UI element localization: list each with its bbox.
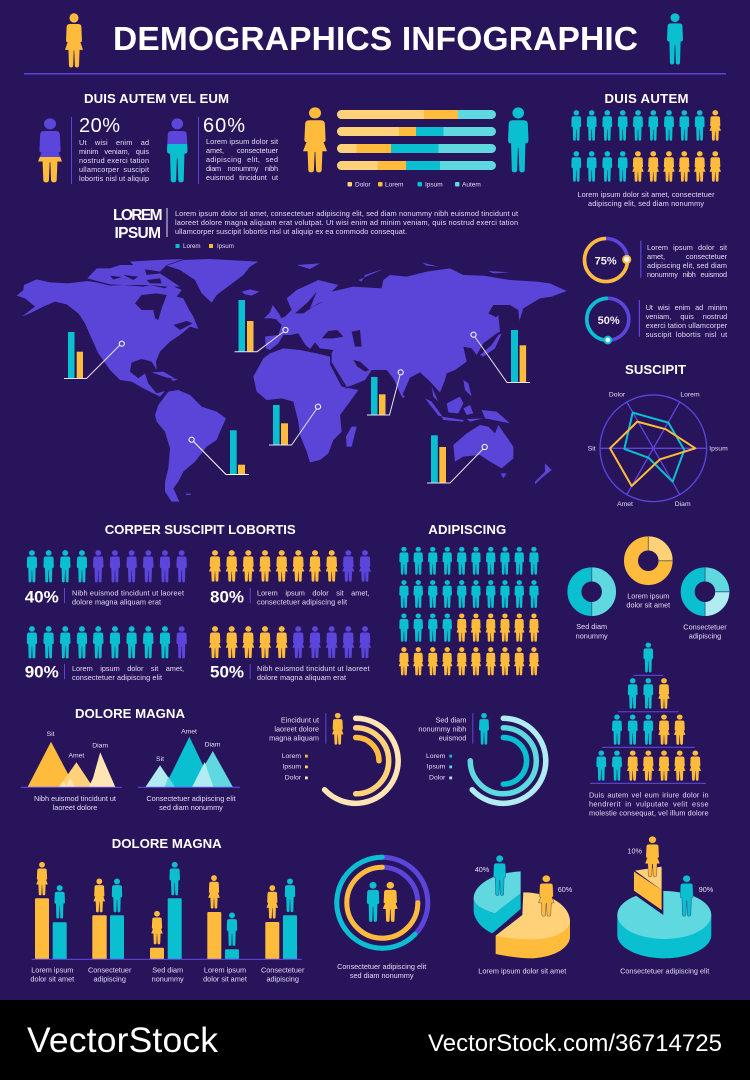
pie labels xyxy=(475,865,573,894)
panel: yellow radial bars xyxy=(269,713,398,803)
radar chart xyxy=(600,395,707,502)
people 80 percent xyxy=(209,550,371,582)
panel: adipiscing people grid xyxy=(399,522,539,675)
legend: Dolor xyxy=(429,775,446,782)
icon: man xyxy=(508,107,528,172)
bar row 1 xyxy=(337,110,496,119)
icon: woman xyxy=(303,107,327,172)
stat 20 percent: lobortis nisl ut aliquip xyxy=(79,174,149,183)
map bars: North America xyxy=(64,332,124,378)
donut left caption: nonummy xyxy=(576,632,608,640)
bars group 5 xyxy=(265,878,297,959)
caption: Consectetuer adipiscing elit xyxy=(337,962,426,971)
map bars: India xyxy=(367,370,403,415)
stat 60 percent: adipiscing elit, sed xyxy=(206,155,278,164)
bars group 1 xyxy=(35,862,67,959)
caption: adipiscing elit, sed diam nonummy xyxy=(588,199,704,208)
stat 60 percent: Lorem ipsum dolor sit xyxy=(206,137,278,146)
ring chart xyxy=(584,238,628,282)
grid row 2 xyxy=(399,580,539,608)
triangle chart right: Sit xyxy=(156,756,164,763)
bar captions: Consectetuer xyxy=(261,966,305,974)
panel: dolore magna triangles xyxy=(21,706,240,812)
text: suscipit lobortis nisl ut xyxy=(646,330,727,339)
stat 80 percent xyxy=(210,587,370,606)
triangle chart right: Amet xyxy=(181,729,197,736)
legend xyxy=(348,182,481,188)
bar captions: adipiscing xyxy=(266,974,299,984)
stat 50 percent xyxy=(210,663,370,682)
grid row 4 xyxy=(399,647,539,675)
pie labels: 90% xyxy=(699,885,714,894)
text: magna aliquam xyxy=(269,734,319,742)
text xyxy=(418,716,466,742)
caption: molestie consequat, vel illum dolore xyxy=(589,808,708,818)
map bars: South America xyxy=(189,430,249,474)
pyramid level 1 xyxy=(633,642,663,676)
bar captions: Lorem ipsum xyxy=(204,966,246,974)
people 40 percent xyxy=(27,550,187,582)
text: laoreet dolore xyxy=(274,724,319,734)
donut right caption: Consectetuer xyxy=(683,622,727,631)
stat 60 percent: diam nonummy nibh xyxy=(206,164,278,173)
heading: DUIS AUTEM xyxy=(604,91,688,106)
bar captions: Consectetuer xyxy=(88,966,132,974)
heading: DOLORE MAGNA xyxy=(75,706,185,721)
stat 20 percent: ullamcorper suscipit xyxy=(79,165,149,174)
triangle chart left: Diam xyxy=(92,743,108,750)
caption right: Consectetuer adipiscing elit xyxy=(146,794,236,803)
ring chart xyxy=(337,857,428,948)
icon: man xyxy=(367,882,379,922)
legend: Lorem xyxy=(183,243,201,250)
radar labels: Dolor xyxy=(609,392,626,398)
legend xyxy=(282,753,308,782)
stat 90 percent: Lorem ipsum dolor sit amet, xyxy=(72,664,184,673)
panel: lorem ipsum intro xyxy=(113,207,518,250)
heading: CORPER SUSCIPIT LOBORTIS xyxy=(105,522,296,537)
donut left xyxy=(574,567,609,616)
bar captions: dolor sit amet xyxy=(203,974,247,984)
panel: progress 50 percent xyxy=(587,298,728,344)
panel: stacked bars xyxy=(303,107,528,188)
legend xyxy=(176,243,234,250)
bar captions: adipiscing xyxy=(93,974,126,984)
map bars: Australia xyxy=(427,435,487,483)
bar captions xyxy=(30,966,305,984)
stat 80 percent: 80% xyxy=(210,587,244,606)
stat 90 percent xyxy=(25,663,184,682)
legend: Dolor xyxy=(285,775,302,782)
footer: watermark band xyxy=(0,1000,750,1080)
bar row 4 xyxy=(337,161,496,170)
panel: dolore magna bar chart xyxy=(30,836,305,984)
caption: Lorem ipsum dolor sit amet xyxy=(478,966,566,976)
pie labels: 60% xyxy=(558,885,573,894)
text: nonummy nibh xyxy=(418,724,466,734)
panel: suscipit radar xyxy=(588,362,728,508)
radar labels xyxy=(588,392,728,508)
paragraph: Lorem ipsum dolor sit amet, consectetuer adipiscing elit, sed diam nonummy nibh euismod tincidunt ut xyxy=(175,209,518,218)
text xyxy=(647,243,728,279)
stat 40 percent xyxy=(25,587,184,606)
caption xyxy=(589,790,708,818)
heading: LOREM xyxy=(113,207,162,224)
icon: woman xyxy=(383,882,398,922)
icon: woman xyxy=(332,713,344,745)
caption: sed diam nonummy xyxy=(350,971,414,980)
caption left: laoreet dolore xyxy=(53,803,97,812)
caption xyxy=(337,962,426,980)
legend: Ipsum xyxy=(217,243,234,250)
panel: corper suscipit lobortis xyxy=(25,522,371,682)
paragraph: ullamcorper suscipit lobortis nisl ut aliquip ex ea commodo consequat. xyxy=(175,227,407,236)
icon: man in header xyxy=(667,13,683,64)
triangle chart right: Diam xyxy=(205,741,221,748)
donut top xyxy=(631,536,673,578)
pie labels xyxy=(627,846,714,894)
text: euismod xyxy=(439,734,466,742)
legend: Lorem xyxy=(282,753,301,760)
bar row 3 xyxy=(337,144,496,153)
heading: SUSCIPIT xyxy=(625,362,686,377)
panel: progress 75 percent xyxy=(584,238,728,282)
text xyxy=(646,303,728,339)
people 90 percent xyxy=(27,626,187,658)
pie chart xyxy=(474,855,570,958)
icon: man xyxy=(479,713,489,745)
panel: people pyramid xyxy=(589,642,708,818)
text: exerci tation ullamcorper xyxy=(646,321,728,330)
stat 40 percent: Nibh euismod tincidunt ut laoreet xyxy=(72,588,184,598)
caption xyxy=(578,190,715,208)
stat 50 percent: Nibh euismod tincidunt ut laoreet xyxy=(257,664,370,673)
icon: man 60 percent xyxy=(167,118,188,182)
donut left caption: Sed diam xyxy=(576,622,607,631)
text: veniam, quis nostrud xyxy=(646,312,727,321)
text: adipiscing elit, sed diam xyxy=(647,261,727,270)
stat 60 percent xyxy=(203,115,279,182)
stat 20 percent: minim veniam, quis xyxy=(79,147,149,156)
map bars: East Asia xyxy=(471,330,530,382)
legend: Ipsum xyxy=(427,764,446,771)
grid row 3 xyxy=(399,613,539,642)
stat 20 percent: 20% xyxy=(79,115,120,137)
bars group 2 xyxy=(92,878,124,959)
donut top caption xyxy=(626,592,670,610)
text: Sed diam xyxy=(435,716,466,724)
radar labels: Amet xyxy=(617,501,633,508)
heading: DUIS AUTEM VEL EUM xyxy=(84,91,229,106)
panel: three donuts xyxy=(574,536,729,640)
bars group 4 xyxy=(207,875,239,959)
pie labels: 40% xyxy=(475,865,490,874)
title: DEMOGRAPHICS INFOGRAPHIC xyxy=(113,21,638,58)
legend: Lorem xyxy=(426,753,446,760)
pie labels: 10% xyxy=(627,846,643,856)
icon: woman in header xyxy=(65,13,83,67)
radial chart xyxy=(470,718,546,803)
panel: duis autem vel eum xyxy=(38,91,279,184)
donut top caption: Lorem ipsum xyxy=(627,592,669,600)
heading: ADIPISCING xyxy=(428,522,506,537)
radar labels: Diam xyxy=(675,501,691,508)
stat 90 percent: 90% xyxy=(25,663,59,682)
bar captions: dolor sit amet xyxy=(30,974,74,984)
pyramid level 3 xyxy=(602,714,695,748)
people 50 percent xyxy=(209,626,371,658)
legend: Autem xyxy=(462,182,481,188)
bar row 2 xyxy=(337,127,496,136)
map bars: Europe xyxy=(234,300,288,352)
donut right caption xyxy=(683,622,727,640)
triangle chart left: Amet xyxy=(68,752,84,759)
heading: DOLORE MAGNA xyxy=(112,836,222,851)
caption: Lorem ipsum dolor sit amet, consectetuer xyxy=(578,190,715,199)
caption right xyxy=(146,794,236,812)
people row 1 xyxy=(571,110,721,141)
bar captions: Lorem ipsum xyxy=(31,966,73,974)
donut right xyxy=(688,567,729,616)
stat 20 percent xyxy=(79,115,149,183)
panel: 3D pie 40 60 xyxy=(474,855,573,976)
caption left xyxy=(34,794,116,812)
caption: Consectetuer adipiscing elit xyxy=(620,966,709,976)
panel: duis autem people xyxy=(571,91,721,208)
triangle chart left: Sit xyxy=(47,731,55,738)
pyramid level 4 xyxy=(590,750,706,784)
text: Ut wisi enim ad minim xyxy=(646,303,727,312)
stat 80 percent: consectetuer adipiscing elit xyxy=(257,598,347,606)
bars group 3 xyxy=(150,862,182,959)
heading xyxy=(113,207,162,242)
radial chart xyxy=(325,718,398,803)
donut right caption: adipiscing xyxy=(689,632,721,640)
text: Lorem ipsum dolor sit xyxy=(647,243,727,252)
radar labels: Lorem xyxy=(680,392,700,398)
image url: VectorStock.com/36714725 xyxy=(428,1030,722,1057)
legend: Lorem xyxy=(385,182,403,188)
caption: Duis autem vel eum iriure dolor in xyxy=(589,790,708,800)
brand name: VectorStock xyxy=(27,1020,218,1060)
stat 90 percent: consectetuer adipiscing elit xyxy=(72,673,162,682)
stat 60 percent: amet, consectetuer xyxy=(206,146,279,155)
bar captions: Sed diam xyxy=(152,966,183,974)
stat 60 percent: 60% xyxy=(203,115,245,137)
heading: IPSUM xyxy=(114,225,161,242)
text: nonummy nibh euismod xyxy=(647,270,727,279)
text: amet, consectetuer xyxy=(647,252,728,261)
stat 50 percent: dolore magna aliquam erat xyxy=(257,673,346,682)
stat 40 percent: dolore magna aliquam erat xyxy=(72,598,161,606)
panel: progress 50 percent: 50% xyxy=(598,315,620,327)
paragraph: laoreet dolore magna aliquam erat volutpat. Ut wisi enim ad minim veniam, quis nostrud exerci tation xyxy=(175,218,518,227)
triangle chart right xyxy=(138,729,240,788)
caption left: Nibh euismod tincidunt ut xyxy=(34,794,116,803)
donut top caption: dolor sit amet xyxy=(626,600,670,610)
grid row 1 xyxy=(399,547,539,575)
stat 50 percent: 50% xyxy=(210,663,244,682)
paragraph xyxy=(175,209,518,236)
stat 80 percent: Lorem ipsum dolor sit amet, xyxy=(257,588,370,598)
caption: hendrerit in vulputate velit esse xyxy=(589,800,708,808)
legend xyxy=(426,753,452,782)
stat 20 percent: Ut wisi enim ad xyxy=(79,138,149,147)
text: Eincidunt ut xyxy=(281,716,319,724)
stat 60 percent: euismod tincidunt ut xyxy=(206,173,278,182)
pyramid level 2 xyxy=(618,678,679,712)
donut left caption xyxy=(576,622,608,640)
world map xyxy=(17,259,567,502)
panel: concentric ring xyxy=(337,857,428,980)
people row 2 xyxy=(571,151,721,182)
legend: Ipsum xyxy=(425,182,443,188)
radar labels: Ipsum xyxy=(709,446,728,452)
triangle chart left xyxy=(21,731,122,788)
stat 40 percent: 40% xyxy=(25,587,59,606)
bar captions: nonummy xyxy=(152,974,184,984)
pie chart xyxy=(617,836,711,958)
panel: teal radial bars xyxy=(418,713,546,803)
stat 20 percent: nostrud exerci tation xyxy=(79,156,149,165)
panel: 3D pie 10 90 xyxy=(617,836,714,976)
radar labels: Sit xyxy=(588,446,596,452)
legend: Dolor xyxy=(355,182,371,188)
ring chart xyxy=(587,298,629,340)
text xyxy=(269,716,319,742)
panel: progress 75 percent: 75% xyxy=(595,256,617,268)
map bars: Africa xyxy=(269,404,321,445)
icon: woman 20 percent xyxy=(38,118,62,182)
caption right: sed diam nonummy xyxy=(159,803,223,812)
legend: Ipsum xyxy=(282,764,301,771)
